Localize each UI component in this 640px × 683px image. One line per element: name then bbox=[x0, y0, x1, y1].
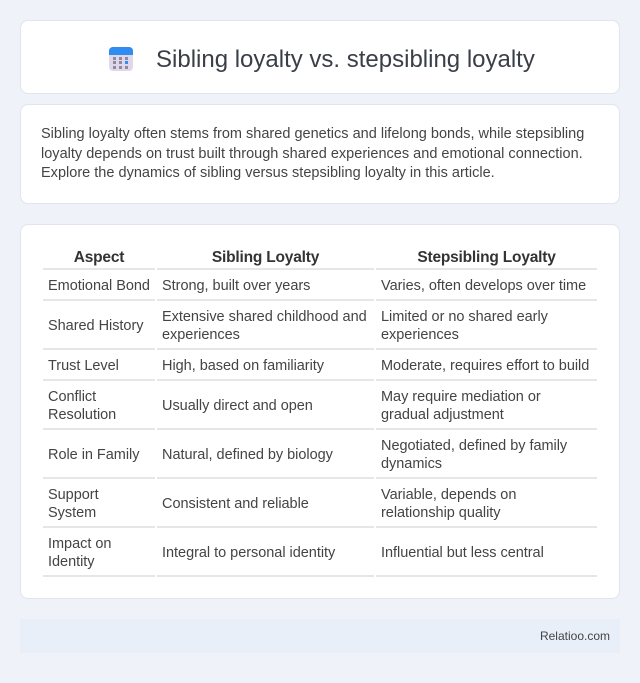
row: support system: Variable, depends on bbox=[381, 487, 516, 503]
row: emotional bond: Strong, built over years bbox=[162, 278, 310, 294]
row: role in family: Negotiated, defined by family bbox=[381, 438, 567, 454]
row: emotional bond: Emotional Bond bbox=[48, 278, 150, 294]
row: support system: Support bbox=[48, 487, 99, 503]
table header: Stepsibling Loyalty bbox=[417, 249, 556, 266]
row: shared history: Extensive shared childhood and bbox=[162, 309, 367, 325]
row: role in family bbox=[48, 438, 568, 472]
intro text bbox=[41, 126, 584, 181]
footer bar bbox=[20, 619, 620, 653]
row: trust level: Trust Level bbox=[48, 358, 119, 374]
row: shared history: experiences bbox=[162, 327, 240, 343]
row: conflict resolution: Conflict bbox=[48, 389, 96, 405]
row: emotional bond bbox=[48, 278, 586, 294]
intro text: loyalty depends on trust built through shared experiences and emotional connection. bbox=[41, 146, 583, 162]
row: impact on identity bbox=[48, 536, 544, 570]
row: conflict resolution: May require mediation or bbox=[381, 389, 541, 405]
row: shared history: experiences bbox=[381, 327, 459, 343]
table header bbox=[74, 249, 556, 266]
row: trust level: High, based on familiarity bbox=[162, 358, 324, 374]
row: conflict resolution: gradual adjustment bbox=[381, 407, 504, 423]
row: conflict resolution bbox=[48, 389, 541, 423]
intro text: Sibling loyalty often stems from shared genetics and lifelong bonds, while stepsibling bbox=[41, 126, 584, 142]
intro text: Explore the dynamics of sibling versus stepsibling loyalty in this article. bbox=[41, 165, 495, 181]
row: role in family: dynamics bbox=[381, 456, 442, 472]
panel: introduction bbox=[20, 104, 620, 204]
row: shared history: Limited or no shared early bbox=[381, 309, 548, 325]
row: conflict resolution: Usually direct and open bbox=[162, 398, 313, 414]
row: shared history: Shared History bbox=[48, 318, 143, 334]
row: role in family: Role in Family bbox=[48, 447, 139, 463]
panel: comparison table bbox=[20, 224, 620, 599]
row: role in family: Natural, defined by biology bbox=[162, 447, 333, 463]
row: shared history bbox=[48, 309, 548, 343]
row: support system: relationship quality bbox=[381, 505, 500, 521]
row: trust level: Moderate, requires effort to build bbox=[381, 358, 589, 374]
row: impact on identity: Integral to personal identity bbox=[162, 545, 335, 561]
row: support system: Consistent and reliable bbox=[162, 496, 309, 512]
row: support system bbox=[48, 487, 516, 521]
row: trust level bbox=[48, 358, 589, 374]
row: support system: System bbox=[48, 505, 96, 521]
title: Sibling loyalty vs. stepsibling loyalty bbox=[156, 46, 535, 73]
footer credit: Relatioo.com bbox=[540, 629, 610, 643]
row: conflict resolution: Resolution bbox=[48, 407, 116, 423]
row: impact on identity: Identity bbox=[48, 554, 95, 570]
icon: calendar bbox=[109, 47, 133, 71]
table header: Aspect bbox=[74, 249, 124, 266]
row: impact on identity: Influential but less central bbox=[381, 545, 544, 561]
row: emotional bond: Varies, often develops over time bbox=[381, 278, 586, 294]
table header: Sibling Loyalty bbox=[212, 249, 319, 266]
row: impact on identity: Impact on bbox=[48, 536, 111, 552]
panel: title card bbox=[20, 20, 620, 94]
